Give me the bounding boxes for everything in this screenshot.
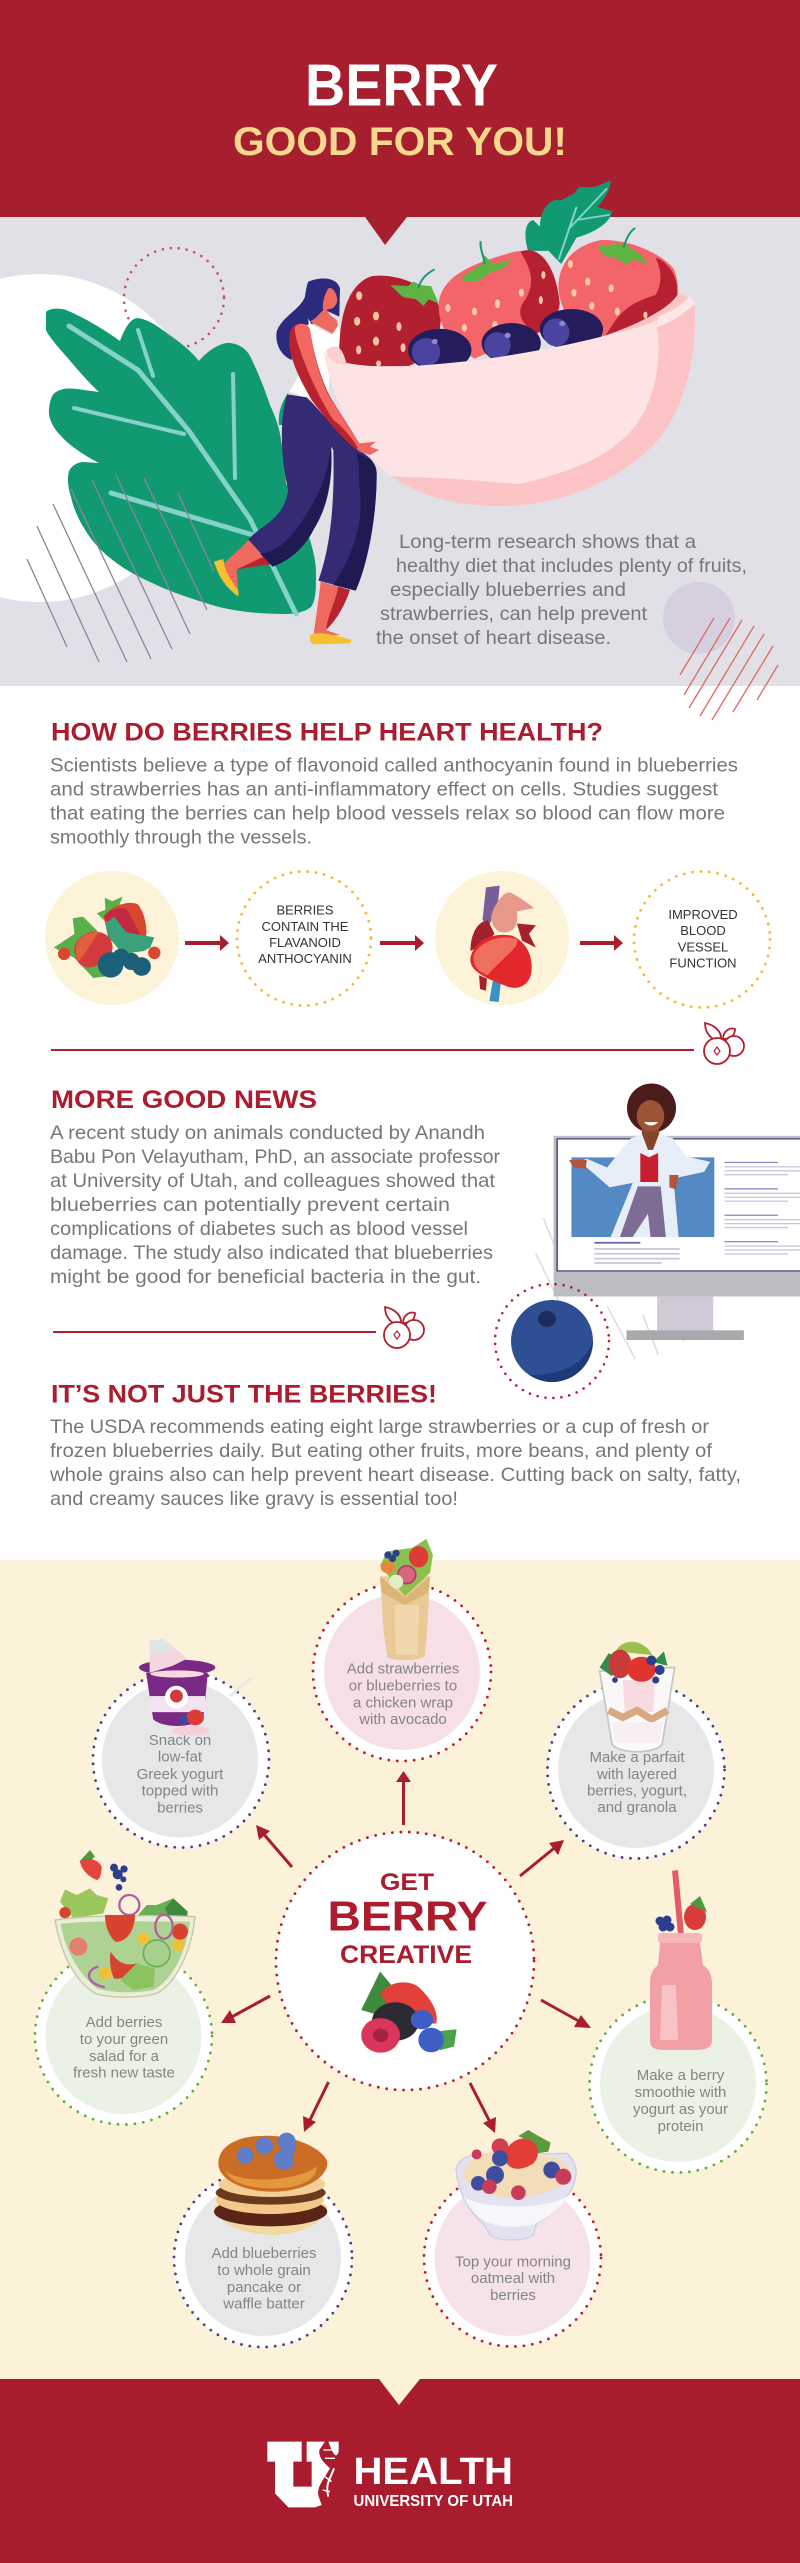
icon: left strawberry [339,269,441,367]
illustration: doctor in monitor [536,1083,800,1359]
flow diagram [45,871,770,1008]
bubble: oatmeal [424,2170,601,2346]
bubble: oatmeal: Top your morning [455,2254,571,2270]
step: improved function: VESSEL [678,940,728,954]
icon: mixed berries [361,1972,457,2053]
step: heart image [435,871,569,1005]
logo: university of utah health [267,2442,513,2510]
icon: right strawberry [558,228,678,337]
bubble: yogurt: Snack on [149,1732,211,1749]
text block: not just the berries: frozen blueberries daily. But eating other fruits, more beans, and plenty of [50,1440,713,1462]
panel: title header [0,0,800,245]
arrows from center [221,1771,591,2133]
step: improved function [634,872,770,1008]
bubble: pancake: to whole grain [217,2262,311,2279]
bubble: pancake: waffle batter [222,2296,305,2312]
panel: footer [0,2379,800,2563]
arrow [580,935,623,951]
text block: how do berries help [50,754,738,848]
bubble: parfait: and granola [597,1799,677,1816]
bubble: yogurt: topped with [142,1782,218,1800]
text block: more good news: blueberries can potentially prevent certain [50,1194,450,1216]
bubble: smoothie: Make a berry [637,2067,725,2084]
illustration: green leaf [46,309,316,614]
bubble: salad: salad for a [89,2048,160,2065]
text block: not just the berries: and creamy sauces like gravy is essential too! [50,1488,458,1510]
step: improved function: IMPROVED [668,907,738,922]
bubble: center get berry creative: CREATIVE [340,1941,472,1969]
bubble: parfait: Make a parfait [589,1749,685,1766]
text block: hero intro [376,531,747,649]
icon: blueberries [408,309,603,371]
heading: how do berries help: HOW DO BERRIES HELP HEART HEALTH? [51,718,603,746]
bubble: wrap [313,1583,491,1761]
bubble: center get berry creative: GET [380,1869,434,1896]
text block: not just the berries [49,1416,741,1510]
logo: university of utah health: HEALTH [354,2451,513,2493]
divider with berry icon [51,1023,744,1064]
icon: oatmeal bowl [456,2130,576,2240]
title: berry: BERRY [305,52,498,118]
bubble: wrap: a chicken wrap [353,1694,453,1712]
bubble: wrap: Add strawberries [347,1660,459,1678]
step: berries image [45,871,179,1005]
text block: not just the berries: The USDA recommends eating eight large strawberries or a cup of fresh or [50,1416,710,1438]
bubble: yogurt [93,1672,269,1848]
step: contains anthocyanin: ANTHOCYANIN [258,951,352,966]
bubble: parfait [548,1682,724,1858]
monitor screen [554,1136,800,1296]
icon: yogurt [139,1639,251,1736]
monitor stand [627,1296,744,1340]
text block: more good news [50,1122,500,1288]
text block: not just the berries: whole grains also can help prevent heart disease. Cutting back on salty, fatty, [49,1464,741,1486]
bubble: yogurt: low-fat [158,1748,203,1766]
heading: more good news: MORE GOOD NEWS [51,1086,317,1114]
text block: hero intro: the onset of heart disease. [376,627,611,649]
bubble: salad: Add berries [86,2014,162,2031]
bubble: yogurt: berries [157,1800,203,1816]
bubble: salad [35,1948,212,2124]
bubble: salad: fresh new taste [73,2064,175,2082]
text block: how do berries help: Scientists believe a type of flavonoid called anthocyanin found in blueberries [50,754,738,776]
step: contains anthocyanin: BERRIES [276,902,334,918]
decorative grey hatch lines [27,475,214,662]
text block: more good news: might be good for beneficial bacteria in the gut. [50,1266,481,1288]
decorative red hatch lines [680,618,778,720]
logo: university of utah health: UNIVERSITY OF UTAH [354,2493,513,2510]
icon: smoothie [650,1870,712,2050]
step: contains anthocyanin [237,872,371,1006]
bubble: center get berry creative [276,1832,534,2090]
text block: how do berries help: and strawberries has an anti-inflammatory effect on cells. Studies suggest [50,778,719,800]
divider with berry icon [53,1307,424,1348]
bubble: smoothie: smoothie with [635,2084,726,2101]
bubble: oatmeal: oatmeal with [471,2270,555,2287]
arrow [380,935,424,951]
step: contains anthocyanin: CONTAIN THE [262,919,349,934]
bubble: smoothie: protein [658,2118,703,2135]
text block: hero intro: healthy diet that includes plenty of fruits, [396,555,747,577]
icon: woman arm and legs [214,324,379,644]
text block: hero intro: especially blueberries and [390,579,626,601]
heading: not just the berries: IT’S NOT JUST THE BERRIES! [51,1380,437,1408]
bubble: smoothie [590,1996,766,2172]
icon: parfait [600,1642,675,1752]
icon: blueberry with dotted ring [495,1284,609,1398]
icon: woman head and top [276,278,342,397]
text block: more good news: at University of Utah, and colleagues showed that [50,1170,496,1192]
illustration: bowl of berries [324,180,695,506]
text block: how do berries help: smoothly through the vessels. [50,826,312,848]
subtitle: good for you: GOOD FOR YOU! [233,120,567,164]
bubble: smoothie: yogurt as your [633,2101,728,2118]
icon: salad [55,1850,195,1997]
bubble: salad: to your green [80,2031,168,2048]
icon: pancakes [214,2133,327,2235]
bubble: parfait: with layered [596,1766,677,1783]
icon: top leaf [525,180,612,264]
bubble: parfait: berries, yogurt, [587,1782,687,1800]
icon: bowl [324,293,695,506]
text block: hero intro: Long-term research shows that a [399,531,696,553]
bubble: pancake [174,2169,352,2347]
bubble: pancake: Add blueberries [211,2245,317,2262]
panel: hero background [0,217,800,686]
icon: middle strawberry [439,241,560,359]
panel: get berry creative [0,1539,800,2379]
arrow [185,935,229,951]
icon: doctor [569,1083,710,1237]
bubble: wrap: with avocado [358,1711,447,1728]
bubble: center get berry creative: BERRY [328,1892,488,1940]
icon: wrap [380,1539,433,1660]
bubble: pancake: pancake or [227,2279,301,2296]
bubble: yogurt: Greek yogurt [137,1766,224,1783]
text block: more good news: complications of diabetes such as blood vessel [50,1218,468,1240]
step: improved function: BLOOD [680,923,726,938]
text block: hero intro: strawberries, can help prevent [380,603,648,625]
text block: more good news: Babu Pon Velayutham, PhD, an associate professor [50,1146,500,1168]
bubble: oatmeal: berries [490,2287,536,2304]
text block: more good news: damage. The study also indicated that blueberries [50,1242,493,1264]
text block: how do berries help: that eating the berries can help blood vessels relax so blood can flow more [50,802,725,824]
bubble: wrap: or blueberries to [349,1678,457,1694]
text block: more good news: A recent study on animals conducted by Anandh [50,1122,485,1144]
step: improved function: FUNCTION [669,956,737,970]
step: contains anthocyanin: FLAVANOID [269,935,341,950]
